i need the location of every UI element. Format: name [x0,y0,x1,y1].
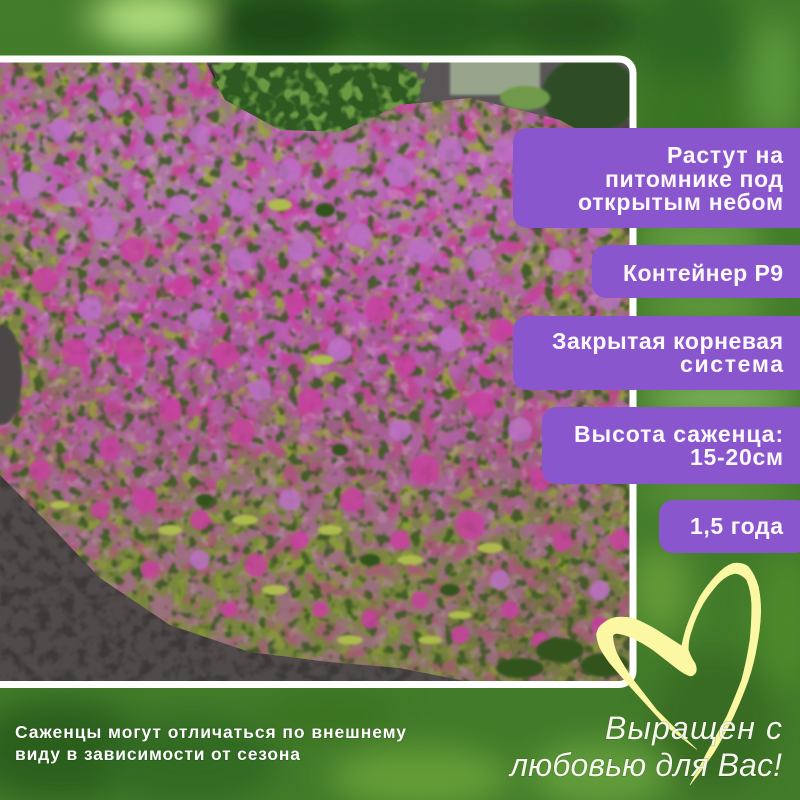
note: seedlings may differ [15,722,406,764]
badge: container: Контейнер Р9 [623,260,783,286]
badge: root system [513,316,800,390]
badge: age [659,500,800,553]
badge: outdoors growing [513,128,800,228]
badge: seedling height [542,407,800,484]
yellow-green leaves [50,199,503,645]
badge: outdoors growing: открытым небом [578,189,783,215]
badge: container [592,245,800,298]
photo: flowering spirea bush [0,46,640,690]
slogan: Выращен с [605,710,782,746]
bright flower clusters [29,237,631,649]
badge: seedling height: Высота саженца: [574,421,783,447]
photo white frame [0,59,633,684]
badge: outdoors growing: питомнике под [605,166,783,192]
slogan: любовью для Вас! [508,747,782,783]
background trees [206,62,630,132]
note: seedlings may differ: Саженцы могут отличаться по внешнему [15,722,406,742]
ground [0,60,640,690]
icon: hand-drawn heart [597,563,761,785]
slogan [508,710,782,783]
badge: root system: Закрытая корневая [552,328,783,354]
badge: root system: система [680,351,783,377]
dark foliage gaps [196,203,629,678]
ground notch at left [0,325,22,425]
badge: age: 1,5 года [690,513,783,539]
bush mass [0,60,640,690]
badge: outdoors growing: Растут на [667,142,783,168]
note: seedlings may differ: виду в зависимости от сезона [15,744,300,764]
badge: seedling height: 15-20см [690,444,783,470]
lower greenery overlay [0,386,630,681]
lilac flower clusters [17,90,621,600]
